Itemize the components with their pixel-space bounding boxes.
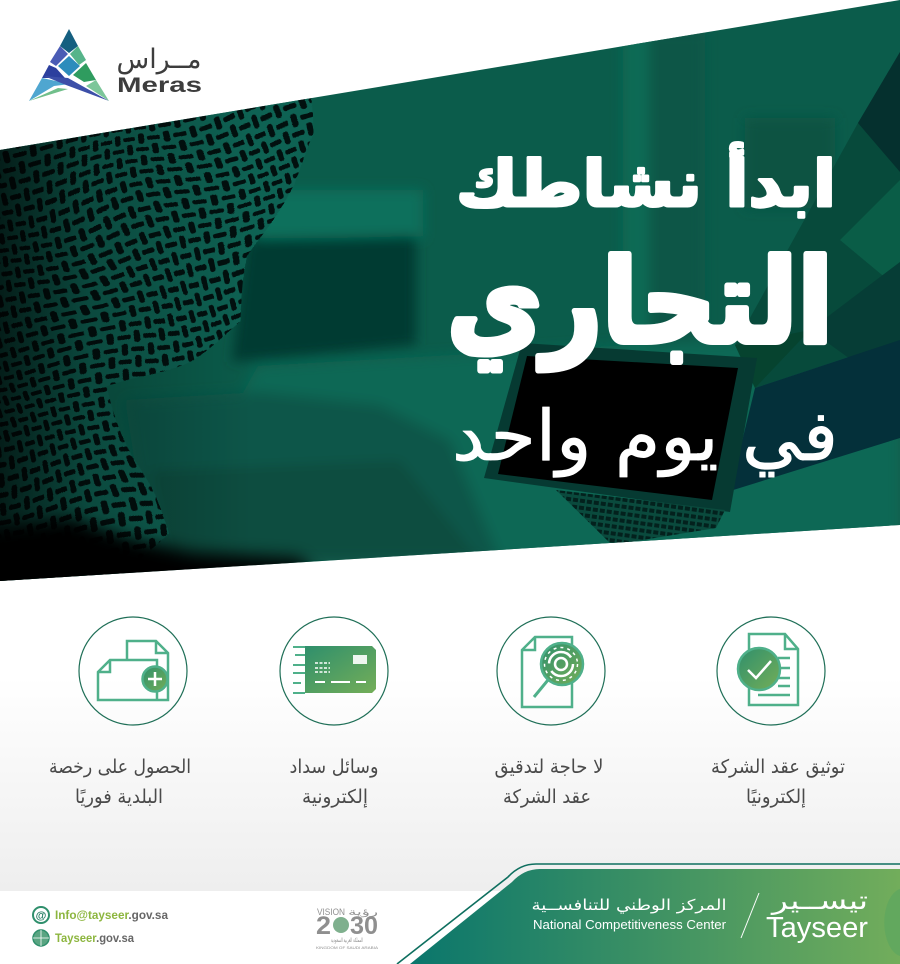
label: إلكترونية [302, 786, 368, 809]
Vision 2030 logo: 30 [350, 912, 378, 940]
label [290, 756, 378, 809]
Vision 2030 logo: KINGDOM OF SAUDI ARABIA [316, 945, 378, 950]
Vision 2030 logo: 2 [316, 912, 331, 940]
Vision 2030 logo: المملكة العربية السعودية [331, 937, 363, 944]
Vision 2030 logo: رؤية [348, 908, 378, 918]
divider slash [741, 893, 759, 938]
centre name: المركز الوطني للتنافســية [532, 896, 726, 915]
hero headline [447, 142, 838, 478]
label: عقد الشركة [503, 786, 591, 808]
logo triangle [29, 29, 109, 101]
headline line 3: في يوم واحد [452, 395, 838, 478]
Tayseer wordmark: Tayseer [766, 912, 868, 944]
label: الحصول على رخصة [49, 756, 191, 778]
logo wordmark [116, 44, 202, 97]
icon: documents with plus [79, 617, 187, 725]
label: توثيق عقد الشركة [711, 756, 845, 778]
Tayseer wordmark: تيســير [769, 886, 868, 915]
logo wordmark: مــراس [116, 44, 202, 75]
label [49, 756, 191, 808]
Vision 2030 logo [316, 907, 378, 950]
headline line 1: ابدأ نشاطك [456, 142, 836, 222]
website contact: Tayseer.gov.sa [55, 931, 134, 945]
hero photo banner [0, 0, 900, 605]
logo wordmark: Meras [117, 74, 202, 97]
feature 1: contract notarization [711, 617, 845, 809]
feature 2: no audit needed [494, 617, 605, 808]
email contact: @ [36, 910, 47, 922]
label: إلكترونيًا [746, 786, 806, 809]
Tayseer footer panel [397, 864, 900, 964]
icon: payment card [280, 617, 388, 725]
panel fill [410, 869, 900, 964]
feature 4: municipal license [49, 617, 191, 808]
centre name [532, 896, 727, 932]
icon: checked document [717, 617, 825, 725]
laptop [484, 343, 757, 545]
footer contact details [33, 907, 168, 946]
label: لا حاجة لتدقيق [494, 756, 604, 778]
label: البلدية فوريًا [75, 786, 163, 808]
panel accent circle [884, 889, 900, 956]
Meras logo [29, 29, 202, 101]
icon: document with magnifier [497, 617, 605, 725]
Vision 2030 logo: VISION [317, 907, 345, 917]
shemagh headscarf [0, 78, 314, 590]
label [711, 756, 845, 809]
label [494, 756, 604, 808]
panel outline [397, 864, 900, 964]
centre name: National Competitiveness Center [533, 917, 727, 932]
footer band [0, 891, 900, 964]
Tayseer wordmark [766, 886, 868, 944]
label: وسائل سداد [290, 756, 378, 778]
background geometric shapes [730, 52, 900, 491]
headline line 2: التجاري [447, 235, 833, 370]
email contact: Info@tayseer.gov.sa [55, 908, 168, 922]
feature 3: electronic payment [280, 617, 388, 809]
